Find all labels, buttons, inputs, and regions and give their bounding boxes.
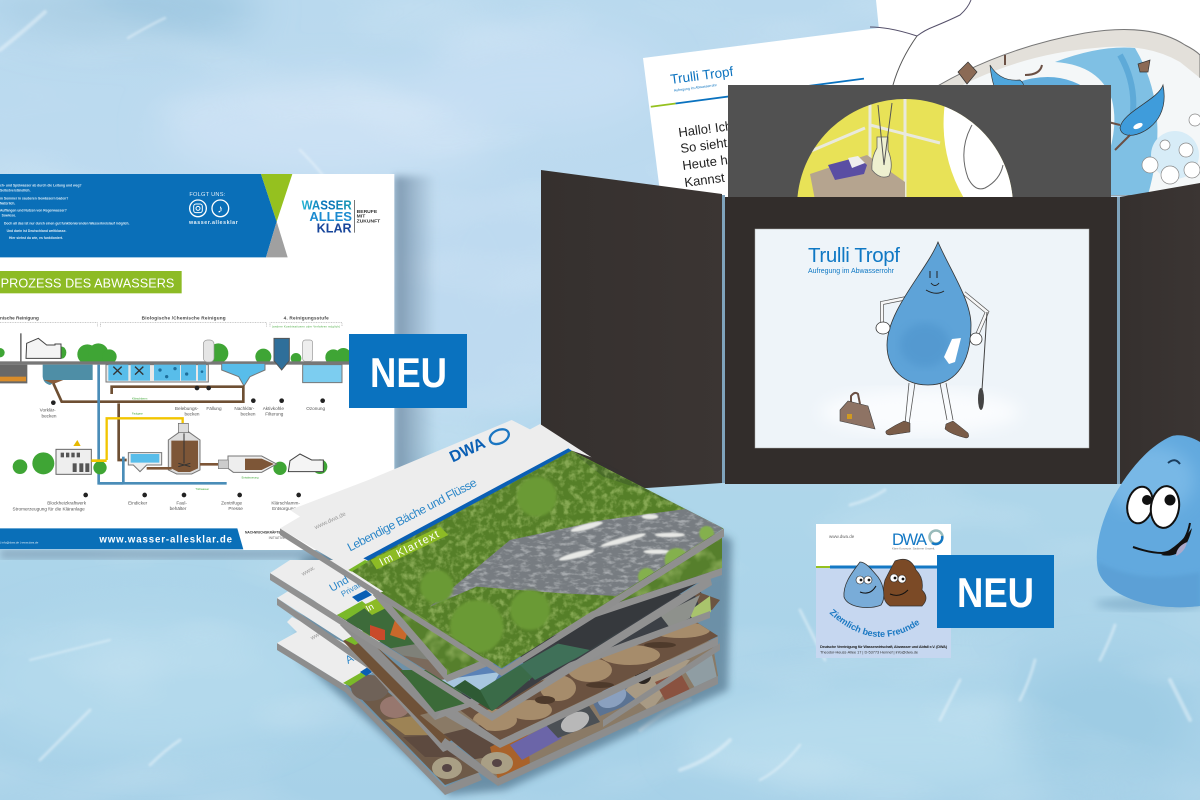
station labels: Eindicker [128,500,148,505]
badge: NEU on sticker [937,555,1054,628]
cover illustration: Aufregung im Abwasserrohr [808,268,895,275]
poster: Prozess des Abwassers [0,174,394,550]
booklet: brown wood layer [277,590,475,752]
character: drop [844,562,884,608]
logo: Wasser alles klar: BERUFE [357,209,378,215]
poster header band: Hier siehst du wie, es funktioniert. [9,236,63,240]
station labels: Filterung [265,412,284,417]
booklet: Lebendige Bäche und Flüsse: DWA [447,435,489,466]
station labels: Zentrifuge [221,500,243,505]
sticker: Ziemlich beste Freunde: Ziemlich beste Freunde [829,608,920,637]
folder back: paper with story text: Heute ha [681,151,736,173]
badge: NEU on poster: NEU [370,349,447,396]
booklet: Abwasser manhole covers, lowest [277,617,482,795]
station labels: Stromerzeugung für die Kläranlage [13,506,85,511]
sticker: Ziemlich beste Freunde [816,524,951,658]
logo: Wasser alles klar: MIT [357,214,365,220]
booklet: road layer [340,590,720,720]
logo: Wasser alles klar: WASSER [302,198,352,213]
logo: DWA: DWA [892,531,927,549]
station labels: Fällung [206,406,222,411]
folder back: paper with story text: So sieht [679,135,728,156]
icon: briefcase [840,393,875,429]
booklet: Abwasser manhole covers, lowest: www. [309,629,326,642]
station labels: Nachklär- [234,406,255,411]
plush drop toy [1095,435,1200,612]
station labels: Ozonung [306,406,326,411]
station labels: Belebungs- [175,406,199,411]
poster footer band: NACHWUCHSKRÄFTE [245,531,281,535]
booklet: Und Privat: Privat [340,580,362,599]
poster header band: Selbstverständlich. [0,189,31,193]
station labels: becken [41,414,57,419]
badge: NEU on sticker: NEU [957,569,1034,616]
poster header band: FOLGT UNS: [189,192,226,198]
process stage headings [0,315,342,328]
logo: DWA: Klare Konzepte. Sauberer Umwelt. [892,546,935,550]
folder back: paper with story text [643,27,910,200]
poster footer band: | info@dwa.de | www.dwa.de [0,541,39,545]
folder back: paper with story text: Hallo! Ich [677,118,733,140]
logo: Wasser alles klar: ALLES [309,209,352,224]
poster header band: ch- und Spülwasser ab durch die Leitung und weg? [0,184,82,188]
heading: Prozess des Abwassers [0,271,182,293]
treatment plant diagram: lower line [13,423,327,491]
station labels: Presse [228,506,243,511]
poster header band: ♪ [217,203,223,215]
cover illustration: Trulli Tropf [808,244,900,267]
folder: centre panel with Trulli Tropf cover [725,197,1120,484]
logo: Wasser alles klar [302,198,380,235]
poster footer band: INITIATIVE [269,536,286,540]
sticker: Ziemlich beste Freunde: Theodor-Heuss-Allee 17 | D-53773 Hennef | info@dwa.de [820,650,918,654]
card: drops in the toilet bowl [870,0,1200,195]
booklet: Lebendige Bäche und Flüsse: Lebendige Bäche und Flüsse [345,475,479,554]
poster header band: Natürlich. [0,201,15,205]
station labels [13,386,326,511]
booklet: Lebendige Bäche und Flüsse: www.dwa.de [313,511,348,532]
folder: back panel with circular window [728,85,1111,200]
folder: right wing [1120,183,1200,484]
folder back: paper with story text: Kannst I [683,169,733,190]
station labels: behälter [170,506,187,511]
treatment plant diagram: lower line: Entwässerung [242,475,259,479]
booklet: manhole tile layer [420,640,720,786]
booklet: Und Privat [270,560,712,721]
booklet: Lebendige Bäche und Flüsse [280,420,737,676]
poster header band: Sowieso. [2,214,16,218]
process stage headings: nische Reinigung [0,315,39,320]
poster header band: Auffangen und Nutzen von Regenwasser? [0,209,67,213]
poster header band: Und darin ist Deutschland weltklasse. [7,229,66,233]
poster header band: wasser.allesklar [188,220,238,226]
station labels: Klärschlamm- [271,500,300,505]
booklet: forest corner layer [373,534,722,682]
poster footer band [0,528,286,549]
logo: DWA [892,530,942,550]
booklet: sandbag layer [446,622,718,748]
process stage headings: 4. Reinigungsstufe [284,315,329,320]
booklet: Lebendige Bäche und Flüsse: Im Klartext [378,528,441,569]
station labels: Vorklär- [40,408,56,413]
booklet: Und Privat: www. [300,565,317,578]
process stage headings: (andere Kombinationen oder Verfahren möglich) [272,324,340,328]
character: poo [883,559,926,606]
treatment plant diagram: upper line: Faulgase [132,412,143,416]
sticker: Ziemlich beste Freunde: Deutsche Vereinigung für Wasserwirtschaft, Abwasser und Abfall e.V. (DWA) [820,644,948,649]
cover illustration [755,229,1089,448]
booklet stack shadow [300,470,732,795]
poster footer band: www.wasser-allesklar.de [98,535,233,546]
station labels: Entsorgung [272,506,296,511]
poster header band [0,174,292,257]
station labels: becken [184,412,200,417]
logo: Wasser alles klar: ZUKUNFT [357,219,380,225]
station labels: Aktivkohle [263,406,284,411]
poster shadow [0,176,436,559]
treatment plant diagram: upper line [0,333,351,483]
logo: Wasser alles klar: KLAR [317,220,352,235]
folder: left wing [541,170,725,490]
folder back: paper with story text: Trulli Tropf [669,64,734,87]
badge: NEU on poster [349,334,467,408]
process stage headings: Biologische /Chemische Reinigung [142,315,226,320]
treatment plant diagram: lower line: Trübwasser [195,487,209,491]
station labels: Faul- [176,500,187,505]
booklet: Und Privat: Und [328,574,351,595]
station labels: Blockheizkraftwerk [47,500,87,505]
cover photo: river and forest [352,450,724,668]
treatment plant diagram: upper line: Klärschlamm [132,396,148,400]
heading: Prozess des Abwassers: PROZESS DES ABWASSERS [1,276,174,290]
poster header band: Doch all das ist nur durch einen gut funktionierenden Wasserkreislauf möglich. [4,221,130,225]
sticker: Ziemlich beste Freunde: www.dwa.de [829,534,855,539]
folder back: paper with story text: Aufregung im Abwasserrohr [674,83,718,93]
booklet: Und Privat: In [364,601,376,614]
character: Trulli Tropf drop [876,242,987,438]
station labels: becken [240,412,256,417]
booklet: Abwasser manhole covers, lowest: Ab [344,649,361,667]
poster header band: m Sommer in sauberen Gewässern baden? [0,196,68,200]
